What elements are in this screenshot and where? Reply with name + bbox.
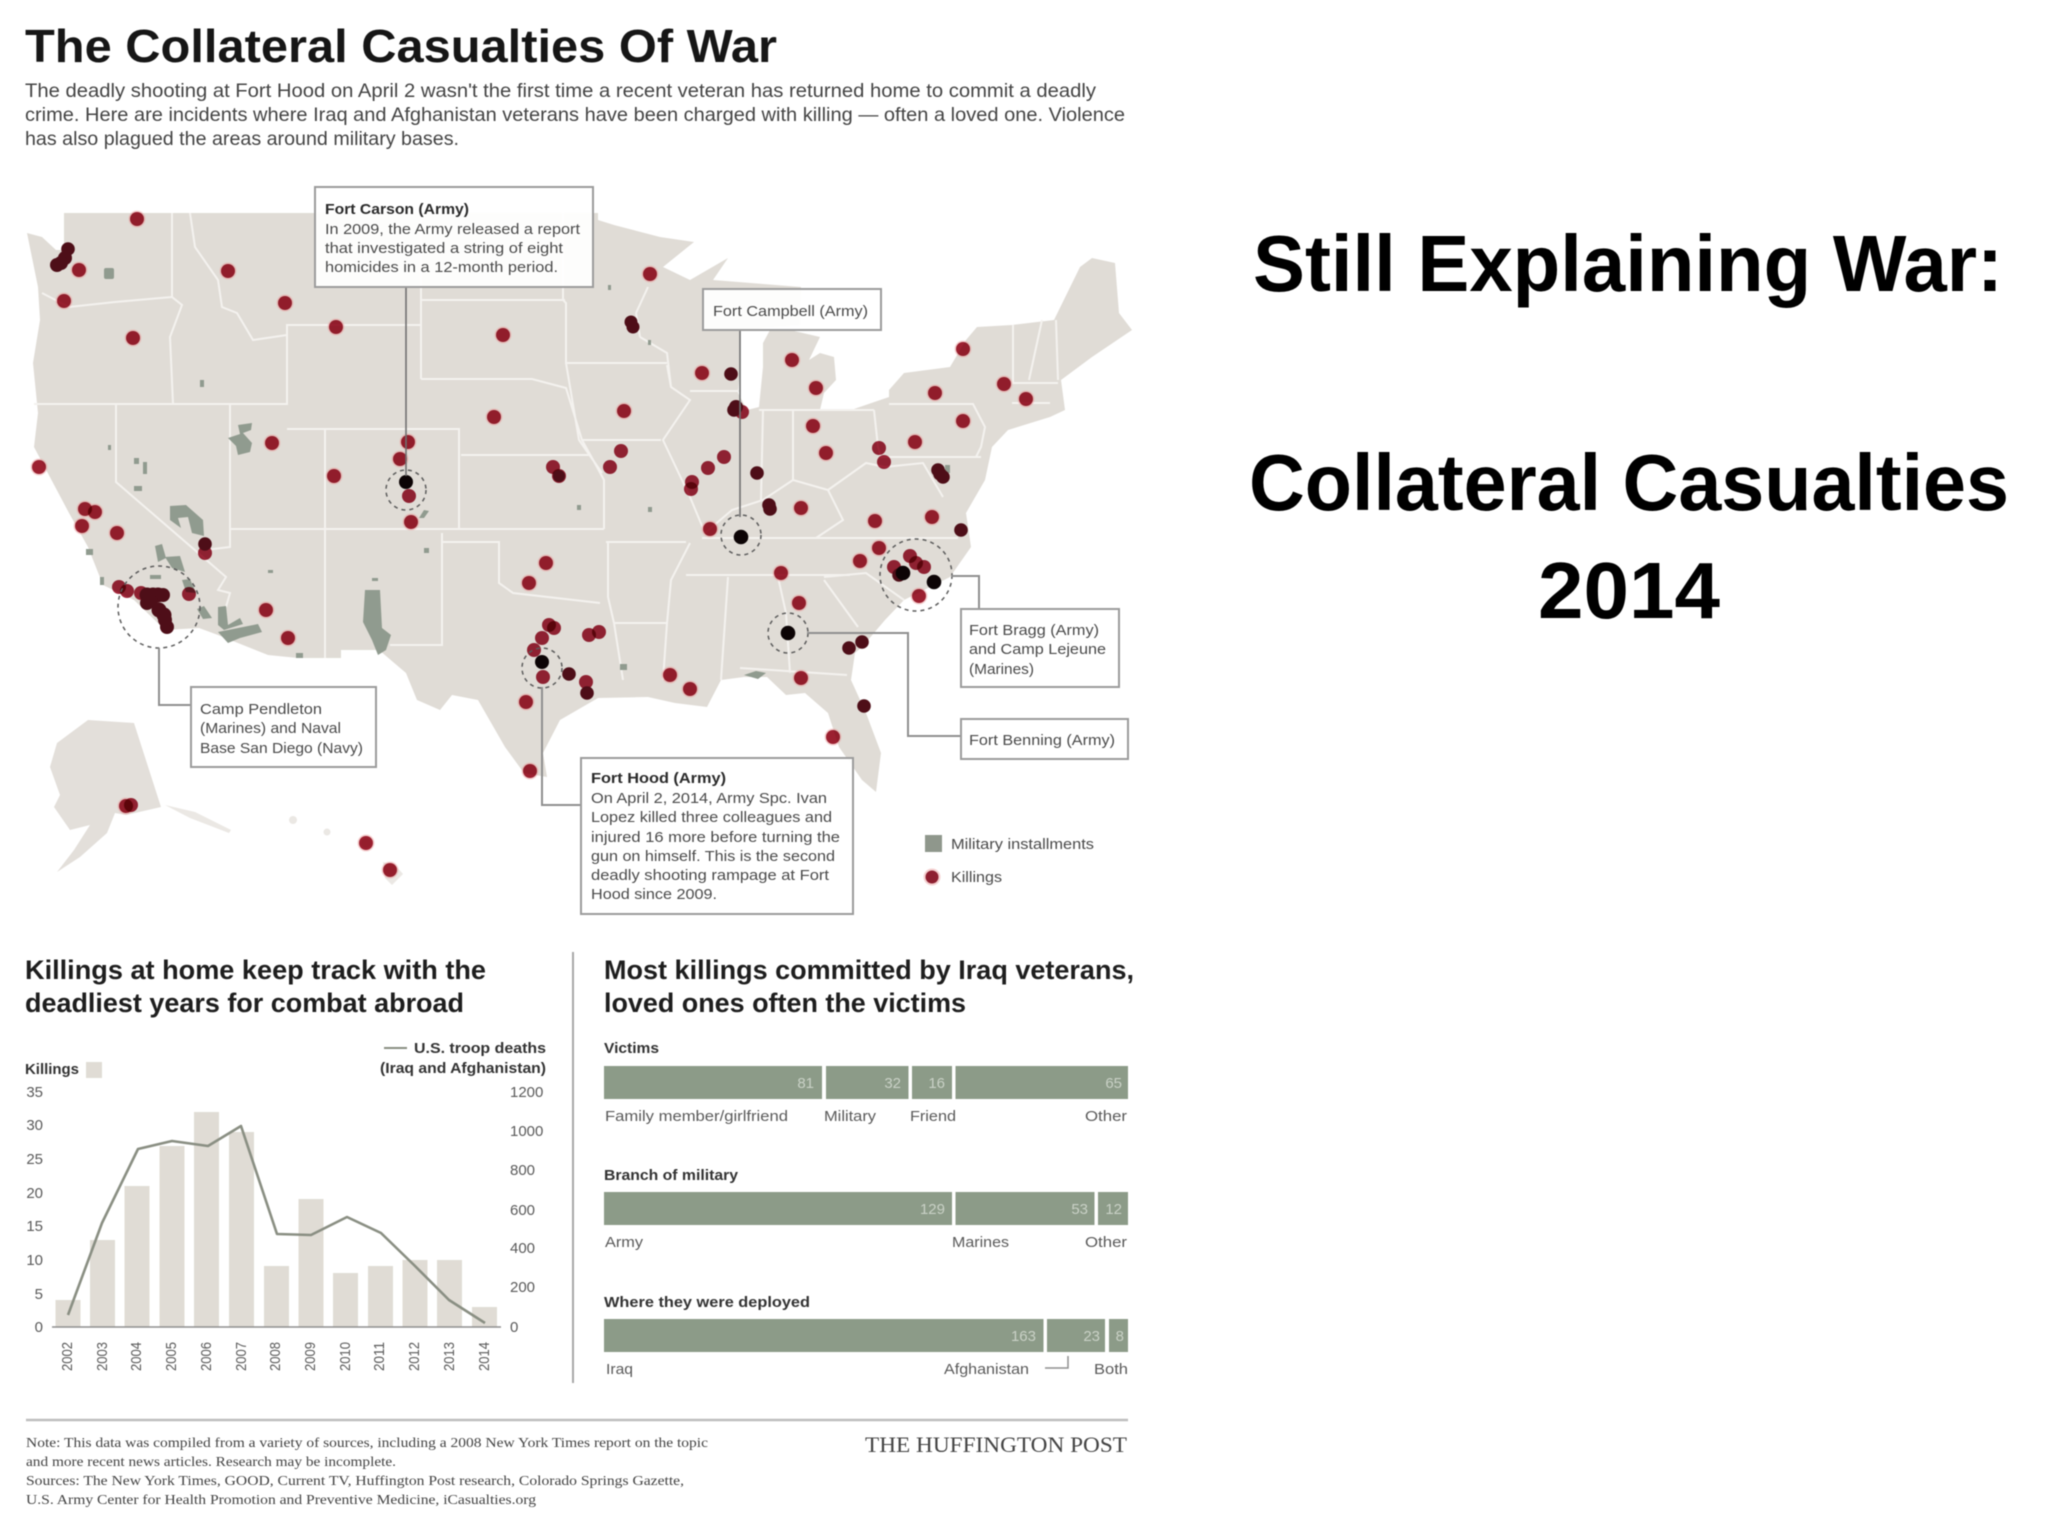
callout: Fort Hood [581, 758, 853, 914]
year labels: 2014 [476, 1342, 493, 1371]
left axis labels: 20 [26, 1185, 43, 1202]
year labels: 2008 [267, 1342, 284, 1371]
legend: troop deaths: (Iraq and Afghanistan) [380, 1060, 546, 1077]
intro text: The deadly shooting at Fort Hood on April 2 wasn't the first time a recent veteran has returned home to commit a deadly [25, 80, 1096, 102]
line: US troop deaths [68, 1126, 485, 1323]
year labels: 2006 [198, 1342, 215, 1371]
right axis labels: 200 [510, 1279, 535, 1296]
left axis labels [26, 1084, 43, 1336]
callout: Fort Hood: Lopez killed three colleagues and [591, 809, 832, 826]
bar group: victims: 32 [884, 1075, 901, 1092]
right axis labels: 600 [510, 1202, 535, 1219]
panel: US map [27, 187, 1132, 914]
legend: Military installments [951, 836, 1094, 853]
right axis labels: 0 [510, 1319, 518, 1336]
leader: Fort Hood [542, 687, 581, 805]
callout: Camp Pendleton and Naval Base San Diego: Camp Pendleton [200, 701, 322, 718]
year labels: 2009 [302, 1342, 319, 1371]
callout: Fort Hood: injured 16 more before turning the [591, 829, 840, 846]
bar group: victims [604, 1040, 1128, 1125]
bar group: where deployed: Where they were deployed [604, 1294, 810, 1311]
year labels: 2012 [406, 1342, 423, 1371]
chart heading: deadliest years for combat abroad [25, 988, 464, 1018]
callout: Fort Benning: Fort Benning (Army) [969, 732, 1115, 749]
legend [924, 835, 1094, 886]
stacked bars heading: loved ones often the victims [604, 988, 966, 1018]
year labels: 2005 [163, 1342, 180, 1371]
callout: Fort Carson: Fort Carson (Army) [325, 201, 469, 218]
year labels: 2002 [59, 1342, 76, 1371]
year labels: 2004 [128, 1342, 145, 1371]
leader: Camp Pendleton [159, 648, 191, 705]
map: Alaska [50, 720, 161, 872]
callout: Fort Carson [315, 187, 593, 287]
callout: Fort Carson: In 2009, the Army released a report [325, 221, 581, 238]
map: killings halos [30, 210, 1034, 878]
left axis labels: 5 [35, 1286, 43, 1303]
bar group: victims: Friend [910, 1108, 956, 1125]
bar group: victims: 81 [797, 1075, 814, 1092]
bar group: victims: 16 [928, 1075, 945, 1092]
bar group: where deployed: 8 [1116, 1328, 1124, 1345]
callout: Fort Hood: deadly shooting rampage at Fort [591, 867, 830, 884]
bar group: branch of military: 53 [1071, 1201, 1088, 1218]
side title: Still Explaining War: [1253, 219, 2003, 308]
left axis labels: 35 [26, 1084, 43, 1101]
map: killings dots [32, 212, 1033, 877]
map: military installations [86, 268, 950, 679]
stacked bars heading [604, 955, 1134, 1018]
callout: Fort Bragg and Camp Lejeune [961, 609, 1119, 687]
axis baseline [52, 1326, 501, 1328]
right axis labels: 800 [510, 1162, 535, 1179]
footer note and sources: Sources: The New York Times, GOOD, Current TV, Huffington Post research, Colorado Springs Gazette, [26, 1474, 684, 1489]
callout: Camp Pendleton and Naval Base San Diego: Base San Diego (Navy) [200, 740, 363, 757]
intro text [25, 80, 1125, 150]
bar group: where deployed: 23 [1083, 1328, 1100, 1345]
map: Alaska panhandle and Hawaii [165, 805, 403, 885]
left axis labels: 15 [26, 1218, 43, 1235]
bar group: branch of military: Other [1085, 1234, 1127, 1251]
Huffington Post credit: THE HUFFINGTON POST [865, 1432, 1128, 1457]
right axis labels [510, 1084, 543, 1336]
title: The Collateral Casualties Of War [25, 20, 777, 72]
footer note and sources [26, 1436, 708, 1508]
callout: Fort Bragg and Camp Lejeune: (Marines) [969, 661, 1034, 678]
bar group: where deployed [604, 1294, 1128, 1378]
leader: Fort Carson [405, 287, 407, 476]
callout: Fort Bragg and Camp Lejeune: and Camp Lejeune [969, 641, 1106, 658]
bar group: branch of military: 129 [920, 1201, 945, 1218]
callout: Camp Pendleton and Naval Base San Diego [191, 687, 376, 767]
callout: Fort Benning [961, 719, 1128, 759]
year labels: 2013 [441, 1342, 458, 1371]
right axis labels: 1200 [510, 1084, 543, 1101]
chart heading: Killings at home keep track with the [25, 955, 486, 985]
callout: Fort Campbell: Fort Campbell (Army) [713, 303, 868, 320]
side title: Collateral Casualties [1249, 438, 2009, 527]
bar group: where deployed: Afghanistan [944, 1361, 1029, 1378]
bar group: victims: Military [824, 1108, 877, 1125]
bar group: victims: Other [1085, 1108, 1127, 1125]
footer note and sources: U.S. Army Center for Health Promotion and Preventive Medicine, iCasualties.org [26, 1493, 536, 1508]
intro text: crime. Here are incidents where Iraq and Afghanistan veterans have been charged with killing — often a loved one. Violence [25, 104, 1125, 126]
bar group: branch of military: 12 [1105, 1201, 1122, 1218]
side title: 2014 [1538, 546, 1721, 635]
leader: Fort Campbell [739, 330, 741, 517]
side title [1249, 219, 2009, 635]
bar group: where deployed: 163 [1011, 1328, 1036, 1345]
bar group: where deployed: Both [1094, 1361, 1128, 1378]
legend: Killings [951, 869, 1002, 886]
bar group: branch of military: Marines [952, 1234, 1009, 1251]
bars: killings per year [56, 1112, 497, 1327]
year labels: 2010 [337, 1342, 354, 1371]
bar group: branch of military [604, 1167, 1128, 1251]
callout: Fort Carson: that investigated a string of eight [325, 240, 564, 257]
bar group: victims: 65 [1105, 1075, 1122, 1092]
legend: killings: Killings [25, 1061, 79, 1078]
year labels: 2007 [233, 1342, 250, 1371]
callout: Fort Campbell [703, 289, 881, 330]
left axis labels: 30 [26, 1117, 43, 1134]
callout: Fort Hood: Fort Hood (Army) [591, 770, 726, 787]
callout: Fort Hood: Hood since 2009. [591, 886, 717, 903]
callout: Fort Hood: gun on himself. This is the second [591, 848, 835, 865]
bar group: victims: Victims [604, 1040, 659, 1057]
intro text: has also plagued the areas around military bases. [25, 128, 459, 150]
callout: Fort Bragg and Camp Lejeune: Fort Bragg (Army) [969, 622, 1099, 639]
callout: Camp Pendleton and Naval Base San Diego: (Marines) and Naval [200, 720, 341, 737]
year labels: 2003 [94, 1342, 111, 1371]
map: installation-site black dots [399, 475, 941, 669]
map: overlapping clusters of killings [50, 242, 968, 713]
legend: troop deaths: U.S. troop deaths [414, 1040, 546, 1057]
map: state borders [34, 213, 1058, 680]
callout: Fort Hood: On April 2, 2014, Army Spc. Ivan [591, 790, 827, 807]
legend: troop deaths [380, 1040, 546, 1077]
leader: Fort Bragg [951, 576, 979, 609]
left axis labels: 25 [26, 1151, 43, 1168]
year labels: 2011 [371, 1342, 388, 1371]
chart heading [25, 955, 486, 1018]
year labels [59, 1342, 493, 1371]
right axis labels: 1000 [510, 1123, 543, 1140]
left axis labels: 10 [26, 1252, 43, 1269]
panel: killings vs troop deaths chart [25, 955, 546, 1371]
leader: Fort Benning [807, 633, 961, 736]
panel: stacked bars [604, 955, 1134, 1378]
bar group: victims: Family member/girlfriend [605, 1108, 788, 1125]
stacked bars heading: Most killings committed by Iraq veterans, [604, 955, 1134, 985]
left axis labels: 0 [35, 1319, 43, 1336]
footer note and sources: and more recent news articles. Research may be incomplete. [26, 1455, 396, 1470]
bar group: where deployed: Iraq [606, 1361, 633, 1378]
callout: Fort Carson: homicides in a 12-month period. [325, 259, 558, 276]
bar group: branch of military: Branch of military [604, 1167, 739, 1184]
footer note and sources: Note: This data was compiled from a variety of sources, including a 2008 New York Times report on the topic [26, 1436, 708, 1451]
map: dashed base circles [118, 470, 952, 688]
map: contiguous US landmass [27, 213, 1132, 792]
bar group: branch of military: Army [605, 1234, 644, 1251]
right axis labels: 400 [510, 1240, 535, 1257]
